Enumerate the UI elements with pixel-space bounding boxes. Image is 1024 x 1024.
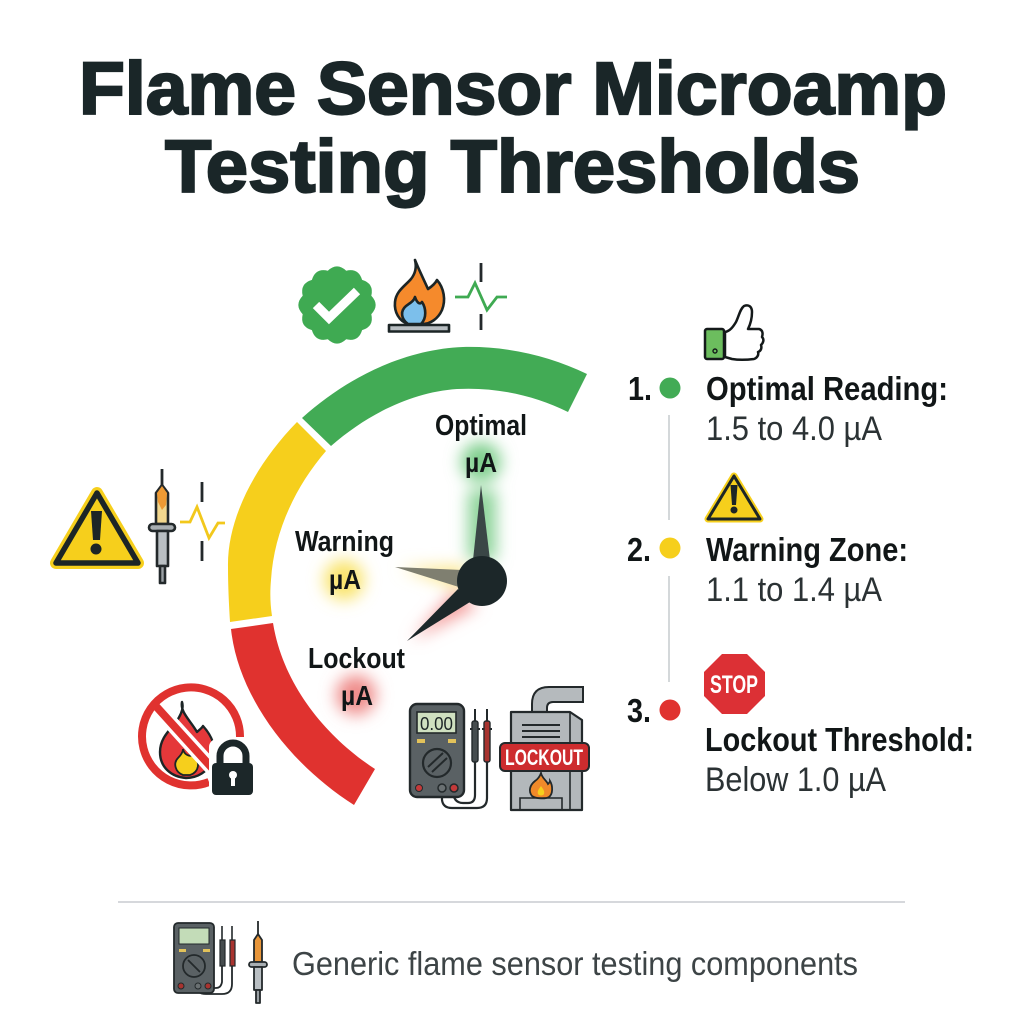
icon: footer flame sensor <box>249 921 267 1003</box>
icon: small warning triangle <box>708 476 760 519</box>
icon: stop sign: STOP <box>710 671 758 699</box>
gauge: green segment <box>302 347 587 446</box>
footer icons <box>174 921 267 1003</box>
gauge label: lockout: Lockout <box>308 643 405 675</box>
icon: multimeter with probes <box>410 704 492 808</box>
status dot: green <box>660 378 680 398</box>
step number 1: 1. <box>628 370 652 407</box>
needle: lockout <box>407 589 470 641</box>
icon: thumbs up <box>705 305 763 360</box>
icon group: warning status <box>56 469 225 583</box>
value: warning range: 1.1 to 1.4 µA <box>706 571 882 609</box>
gauge label: optimal <box>435 410 527 478</box>
heading: warning zone: Warning Zone: <box>706 531 908 568</box>
status dot: yellow <box>660 538 680 558</box>
icon: furnace with lockout banner: LOCKOUT <box>505 745 583 770</box>
icon: flame sensor rod <box>149 469 175 583</box>
legend item 1: optimal <box>628 305 948 448</box>
legend item 3: lockout <box>627 654 974 799</box>
icon: green signal pulse <box>455 263 507 330</box>
heading: optimal reading: Optimal Reading: <box>706 370 948 407</box>
gauge label: warning: µA <box>329 564 361 595</box>
gauge label: warning <box>295 526 394 595</box>
icon: furnace with lockout banner <box>500 687 589 810</box>
footer caption: Generic flame sensor testing components <box>292 945 858 982</box>
gauge hub <box>457 556 507 606</box>
gauge label: lockout <box>308 643 405 711</box>
gauge arc <box>228 347 587 805</box>
icon: yellow signal pulse <box>180 482 225 561</box>
value: optimal range: 1.5 to 4.0 µA <box>706 410 882 448</box>
title: Testing Thresholds <box>165 125 860 208</box>
gauge label: warning: Warning <box>295 526 394 558</box>
icon: healthy burner flame <box>389 260 449 332</box>
gauge label: optimal: µA <box>465 447 497 478</box>
icon: stop sign <box>704 654 765 714</box>
status dot: red <box>660 700 680 720</box>
gauge label: optimal: Optimal <box>435 410 527 442</box>
icon: green check badge <box>298 266 376 344</box>
connector line between steps <box>668 415 670 682</box>
gauge: red segment <box>231 623 375 805</box>
legend item 2: warning <box>627 476 908 609</box>
gauge glows <box>324 442 501 715</box>
icon group: optimal status <box>298 260 507 344</box>
gauge label: lockout: µA <box>341 680 373 711</box>
gauge needles <box>395 485 507 641</box>
gauge: yellow segment <box>228 422 326 622</box>
value: lockout range: Below 1.0 µA <box>705 761 886 799</box>
heading: lockout threshold: Lockout Threshold: <box>705 721 974 758</box>
icon group: lockout status <box>142 687 257 799</box>
title: Flame Sensor Microamp <box>79 47 947 130</box>
title <box>79 47 947 208</box>
icon: footer multimeter <box>174 923 235 994</box>
needle: warning <box>395 567 462 588</box>
icon: multimeter with probes: 0.00 <box>420 714 453 734</box>
step number 3: 3. <box>627 692 651 729</box>
icon: no-flame sign <box>142 687 240 785</box>
icon: warning triangle <box>56 493 138 563</box>
icon: padlock <box>209 739 257 799</box>
step number 2: 2. <box>627 531 651 568</box>
needle: optimal <box>473 485 490 560</box>
